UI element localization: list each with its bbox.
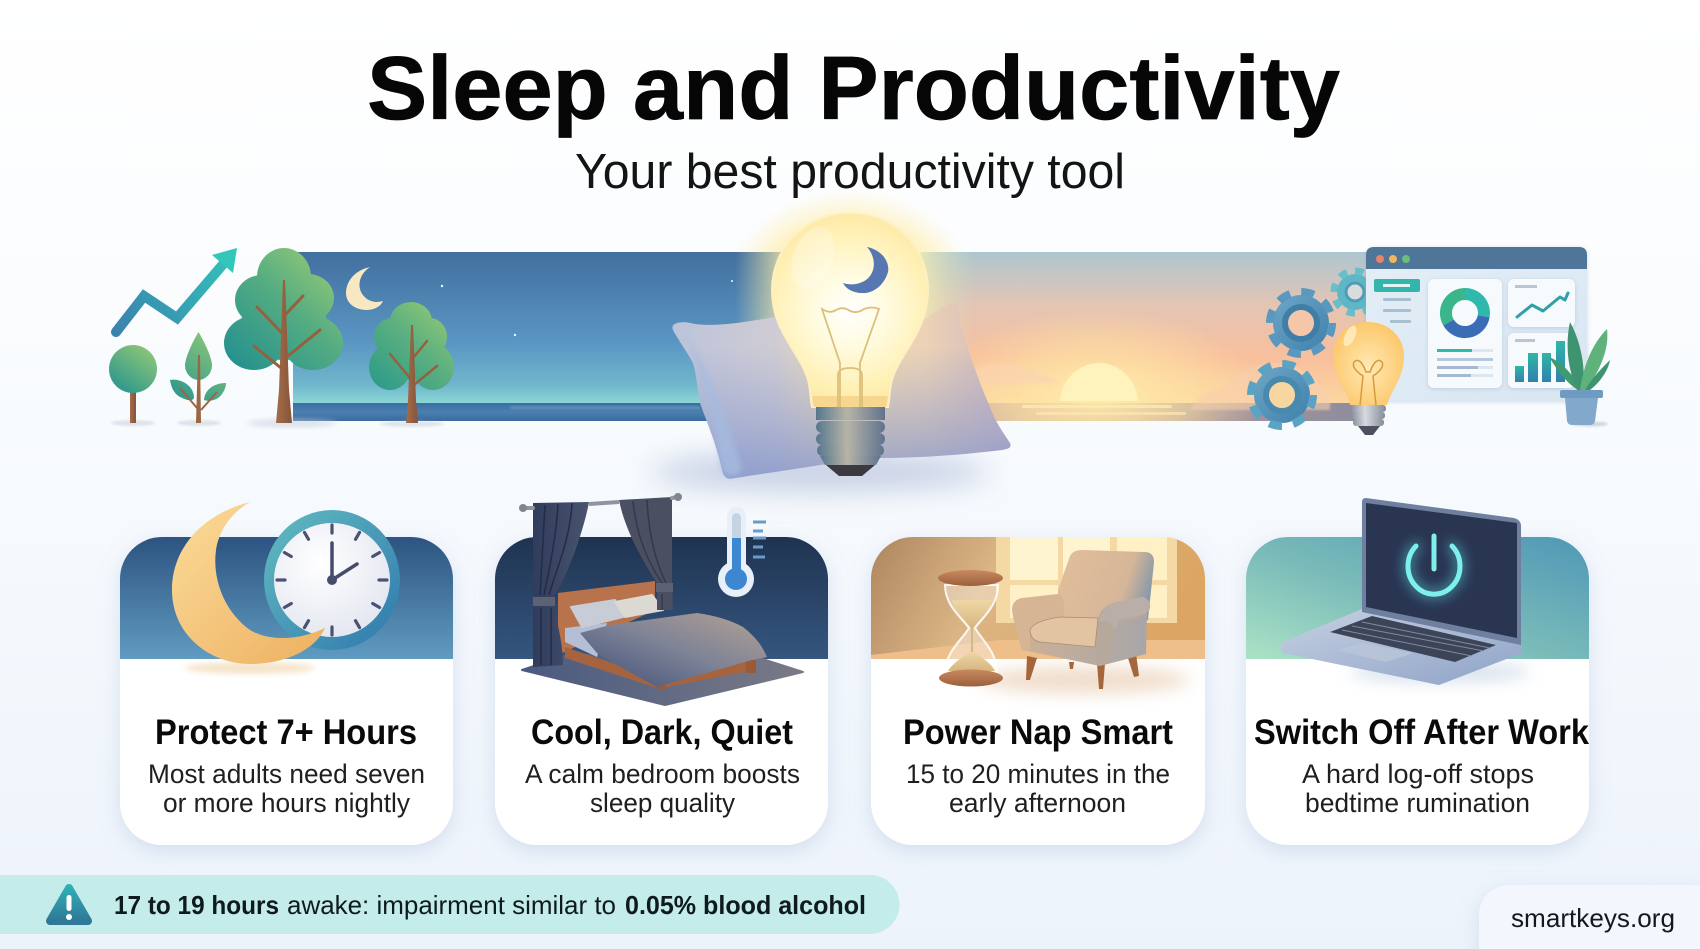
night sky panel <box>293 252 793 421</box>
gear: large <box>1270 292 1332 354</box>
line chart card <box>1508 279 1575 327</box>
sprout tree <box>170 332 226 426</box>
icon: warning triangle <box>50 888 88 921</box>
card 1 header <box>120 537 453 659</box>
medium tree <box>369 302 454 427</box>
card 2: cool, dark, quiet <box>495 493 828 845</box>
card 2 heading: Cool, Dark, Quiet <box>531 713 793 752</box>
card 1 heading: Protect 7+ Hours <box>155 713 417 752</box>
pillow <box>650 303 1011 492</box>
hero banner: night to sunrise scene <box>293 252 1366 421</box>
potted plant <box>1549 322 1610 426</box>
gear icons <box>1251 292 1332 426</box>
icon: bedroom <box>519 493 803 705</box>
warning text: awake: impairment similar to <box>287 890 616 920</box>
card 2 header <box>495 537 828 659</box>
website tag: smartkeys.org <box>1511 903 1675 933</box>
warning text: 17 to 19 hours <box>114 890 279 920</box>
crescent moon in sky <box>346 267 383 310</box>
card 2 text: A calm bedroom boosts <box>525 759 800 789</box>
subtitle: Your best productivity tool <box>575 145 1125 199</box>
rug <box>522 655 803 705</box>
card 1 text: or more hours nightly <box>163 788 410 818</box>
card 4: switch off after work <box>1246 498 1589 845</box>
warning text <box>114 890 866 920</box>
right curtain <box>619 497 673 610</box>
card 1: protect 7+ hours <box>120 502 453 845</box>
sunrise sky panel <box>920 252 1366 421</box>
headboard <box>558 581 655 655</box>
card 4 text: bedtime rumination <box>1305 788 1530 818</box>
card 2 text: sleep quality <box>590 788 735 818</box>
bar chart card <box>1508 333 1575 388</box>
card 4 text: A hard log-off stops <box>1302 759 1534 789</box>
donut card <box>1428 279 1502 388</box>
card 4 header <box>1246 537 1589 659</box>
card 1 text <box>148 759 425 818</box>
power symbol <box>1408 536 1460 594</box>
filament <box>822 308 879 407</box>
curtain rod <box>589 502 619 504</box>
warning text: 0.05% blood alcohol <box>625 890 866 920</box>
card 3 text <box>906 759 1170 818</box>
floor shade <box>980 666 1190 694</box>
sunny window <box>871 537 1205 659</box>
card 3 text: 15 to 20 minutes in the <box>906 759 1170 789</box>
card 4 text <box>1302 759 1534 818</box>
keyboard <box>1330 616 1496 662</box>
sun <box>1060 363 1138 401</box>
gear: lower <box>1251 364 1313 426</box>
screw base <box>816 407 885 476</box>
icon: clock <box>264 510 400 650</box>
laptop screen <box>1362 498 1521 645</box>
bed frame <box>565 647 755 688</box>
title: Sleep and Productivity <box>367 39 1340 139</box>
card 3 heading: Power Nap Smart <box>903 713 1173 752</box>
touchpad <box>1337 643 1413 662</box>
large tree <box>224 248 343 427</box>
dashboard window <box>1366 247 1587 401</box>
duvet <box>580 613 767 687</box>
left curtain <box>533 502 589 667</box>
icon: crescent moon <box>172 502 325 664</box>
website tag <box>1479 885 1700 949</box>
laptop shadow <box>1350 662 1530 682</box>
moon inside bulb <box>843 247 888 293</box>
card 3 header <box>871 537 1205 659</box>
card 3: power nap smart <box>871 537 1205 845</box>
small round tree <box>109 345 157 426</box>
icon: laptop <box>1283 498 1530 684</box>
laptop base <box>1283 610 1522 684</box>
icon: armchair <box>1012 550 1154 689</box>
sheet <box>565 623 607 657</box>
warning callout bar <box>0 875 900 934</box>
card 3 text: early afternoon <box>949 788 1126 818</box>
gear: rear <box>1334 271 1376 313</box>
sidebar <box>1374 279 1420 323</box>
card 2 text <box>525 759 800 818</box>
small light bulb <box>1333 322 1404 435</box>
bulb glow <box>722 188 978 404</box>
card 4 heading: Switch Off After Work <box>1254 713 1589 752</box>
pillows <box>571 600 623 627</box>
growth arrow <box>116 248 237 332</box>
icon: hourglass <box>938 570 1003 686</box>
icon: thermometer <box>718 507 766 597</box>
card 1 text: Most adults need seven <box>148 759 425 789</box>
main light bulb with moon <box>772 213 928 476</box>
